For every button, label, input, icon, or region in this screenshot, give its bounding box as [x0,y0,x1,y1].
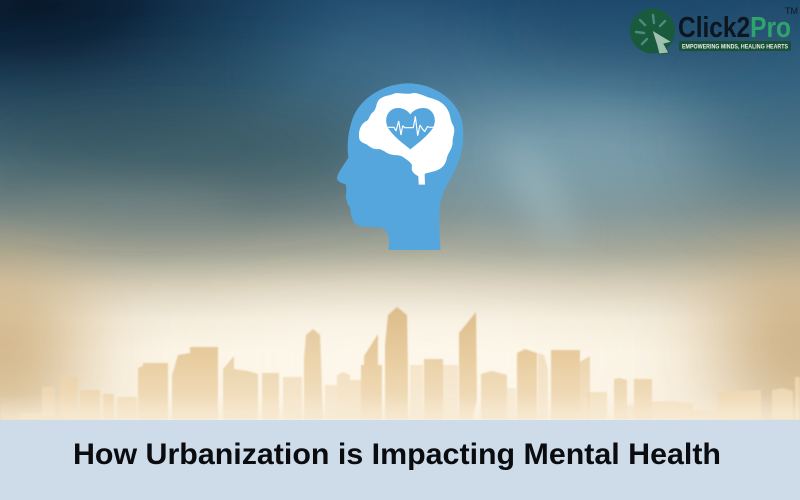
heartbeat line [388,116,435,136]
logo tagline [679,41,791,51]
brain [359,93,454,185]
head silhouette [337,83,463,250]
logo wordmark: Click2Pro [678,12,791,44]
logo: Click2Pro [630,6,798,54]
icon: head with brain and heartbeat [337,83,463,250]
bottom title band [0,420,800,500]
logo tagline: EMPOWERING MINDS, HEALING HEARTS [682,44,788,50]
city skyline [0,307,800,420]
heart [386,108,435,149]
logo icon: cursor badge [630,8,675,54]
title: How Urbanization is Impacting Mental Health [73,438,721,471]
trademark: TM [785,6,798,16]
